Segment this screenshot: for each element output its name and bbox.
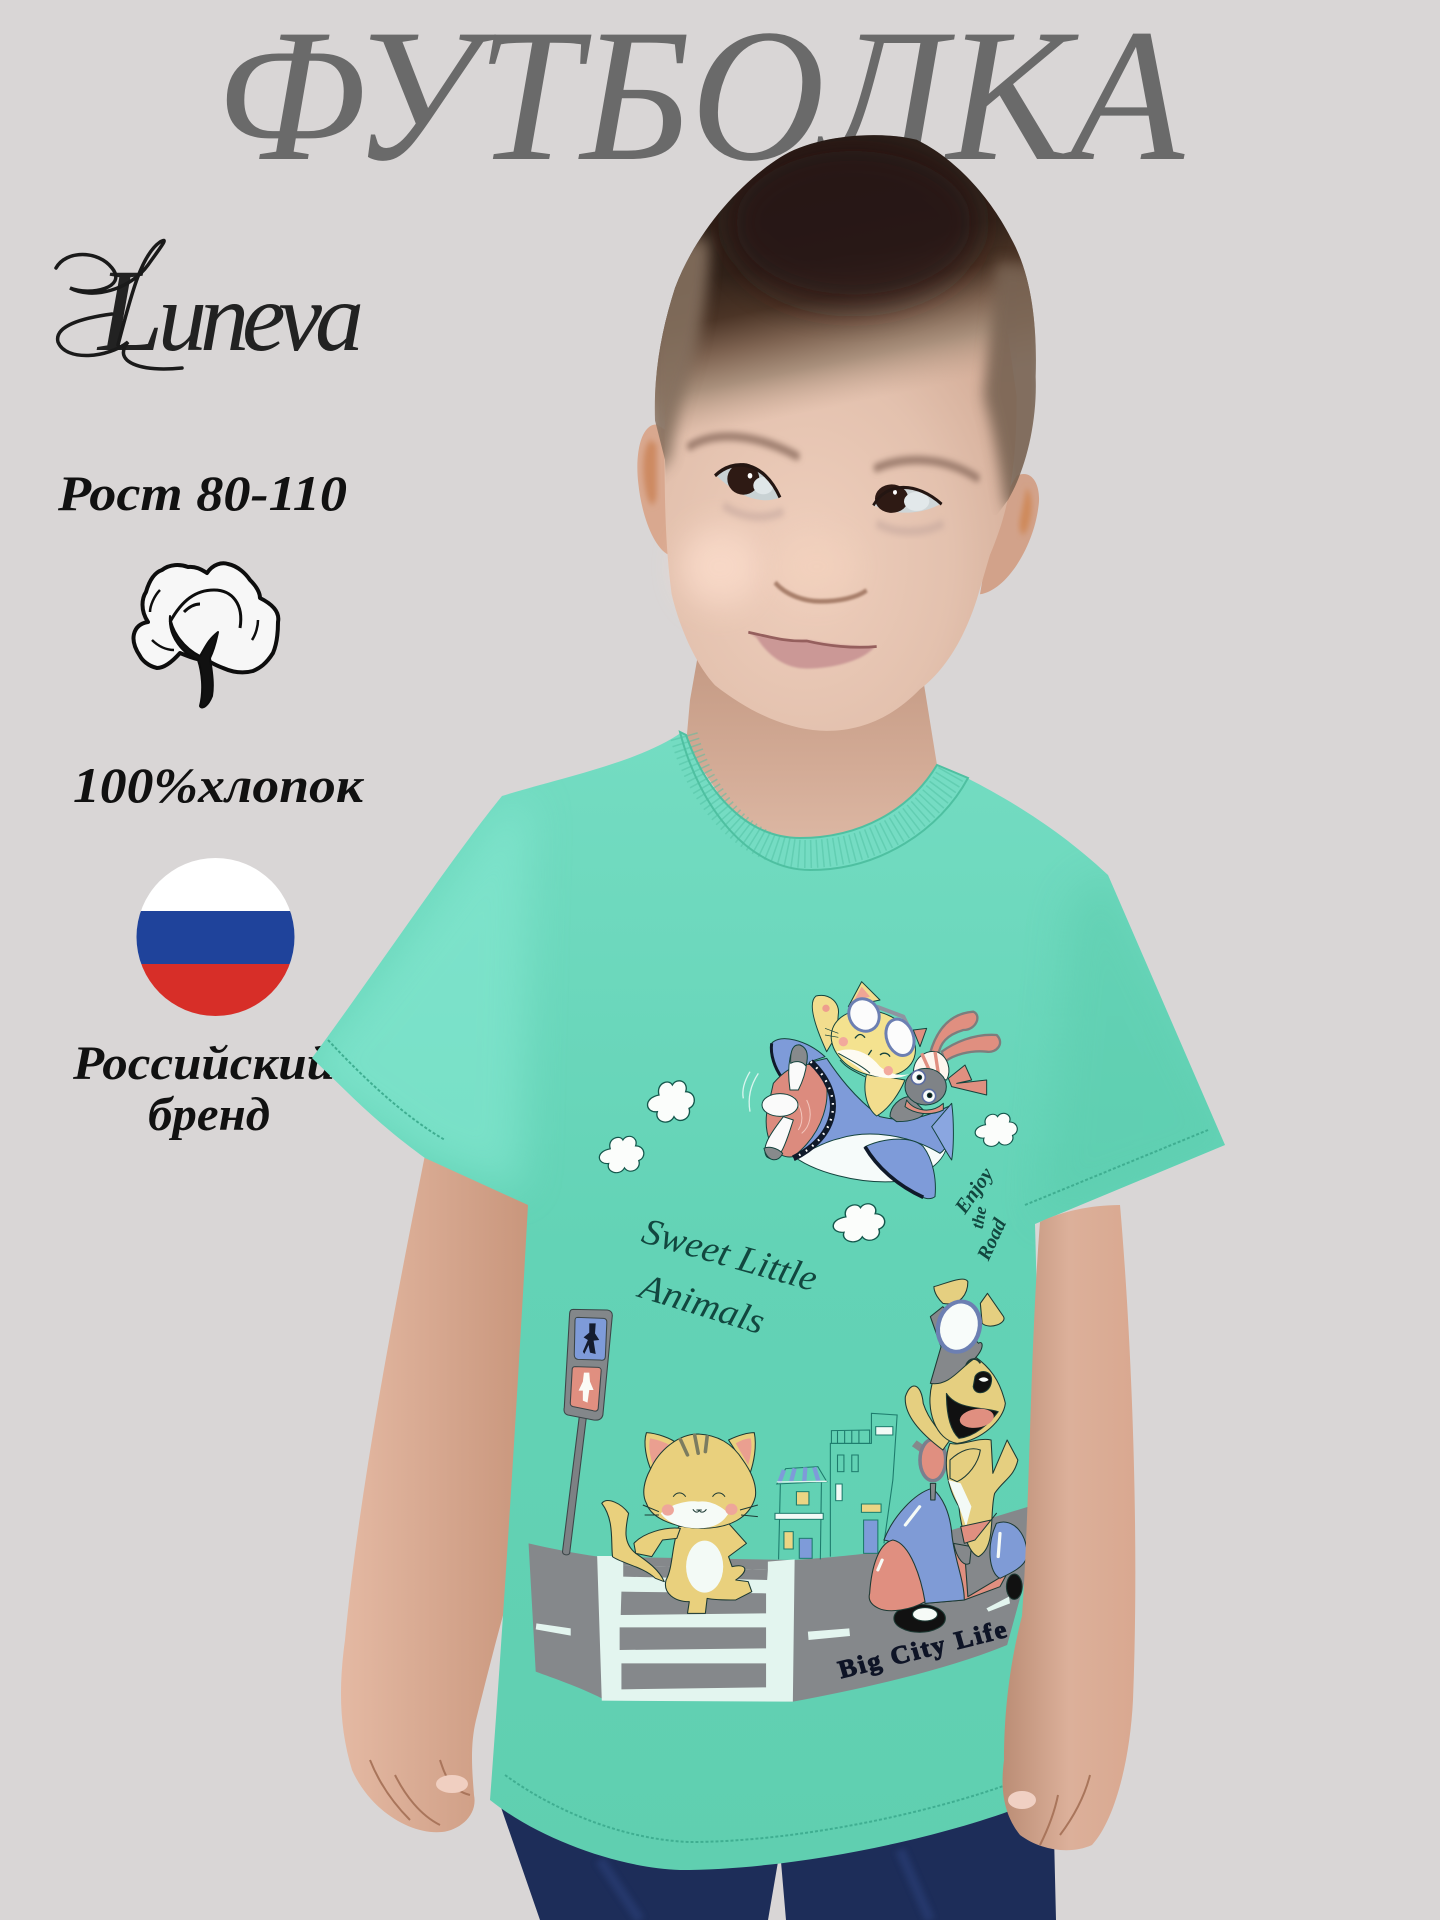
brand logo: L [96,245,164,376]
airplane [743,1039,953,1199]
hair vertical tone [654,135,1036,426]
hair [654,135,1036,510]
left temple [650,239,710,476]
under-eye shadow [723,505,943,531]
road lettering: Big City Life [835,1615,1012,1684]
print lettering: Sweet Little [638,1211,822,1300]
icon: cotton boll [133,563,278,708]
right arm [1003,1205,1135,1850]
sleeve shading [300,800,1240,1220]
t-shirt print: plane and clouds [599,982,1017,1342]
cotton label: 100%хлопок [73,757,365,813]
neck [686,570,945,900]
print lettering: Animals [633,1264,770,1342]
kitten [602,1433,758,1613]
left arm [341,1140,535,1832]
ears [637,424,1039,594]
scooter [869,1439,1027,1632]
nose [775,537,867,601]
passenger mouse with scarf [890,1012,1000,1122]
right temple [983,262,1047,515]
brand origin label: бренд [148,1088,270,1141]
print lettering: Enjoy [950,1163,999,1219]
dog rider [905,1279,1018,1557]
jeans [495,1750,1056,1920]
head [633,120,1067,731]
eyebrows [690,436,977,478]
height label: Рост 80-110 [57,465,347,521]
right eye [873,484,942,513]
brand origin label [72,1037,335,1141]
hem stitching [328,1040,1208,1842]
zebra crossing [536,1556,1010,1702]
print lettering [633,1163,1012,1342]
left eye [715,463,780,500]
buildings [775,1413,897,1559]
t-shirt print: street scene [529,1279,1029,1702]
print lettering: the [968,1205,991,1230]
brand logo: uneva [158,264,361,372]
traffic light [562,1309,612,1555]
hair crown [727,140,980,306]
clouds [599,1081,1017,1242]
brand logo [56,240,361,376]
pilot cat [812,982,927,1116]
boy figure [300,120,1240,1920]
t-shirt [300,732,1240,1870]
brand origin label: Российский [72,1037,335,1090]
cheek highlight [680,527,760,606]
print lettering: Road [972,1214,1012,1265]
road [529,1507,1029,1702]
mouth [748,632,877,669]
collar rib [680,732,968,870]
face [665,278,1017,731]
icon: russian flag [136,858,294,1016]
